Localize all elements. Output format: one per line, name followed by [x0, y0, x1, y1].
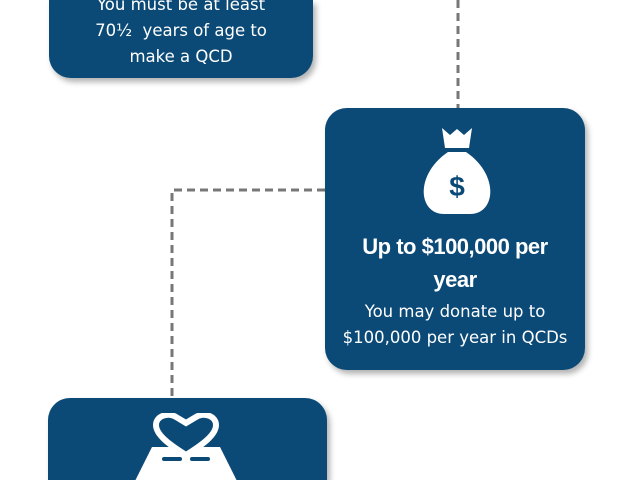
heading: donation limit: Up to $100,000 per — [362, 234, 548, 259]
icon: money bag: $ — [449, 171, 465, 202]
text: age body: 70½ years of age to — [95, 21, 267, 40]
text: donation body: $100,000 per year in QCDs — [343, 328, 567, 347]
panel: age requirement — [49, 0, 313, 78]
text: donation body — [343, 302, 567, 347]
panel: donation limit — [325, 108, 585, 370]
heading: donation limit — [362, 234, 548, 292]
text: age body — [95, 0, 267, 66]
icon: heart in box — [136, 413, 236, 480]
text: age body: make a QCD — [129, 47, 233, 66]
text: donation body: You may donate up to — [365, 302, 545, 321]
heading: donation limit: year — [433, 267, 477, 292]
panel: charity — [48, 398, 327, 480]
icon: money bag — [424, 128, 490, 214]
